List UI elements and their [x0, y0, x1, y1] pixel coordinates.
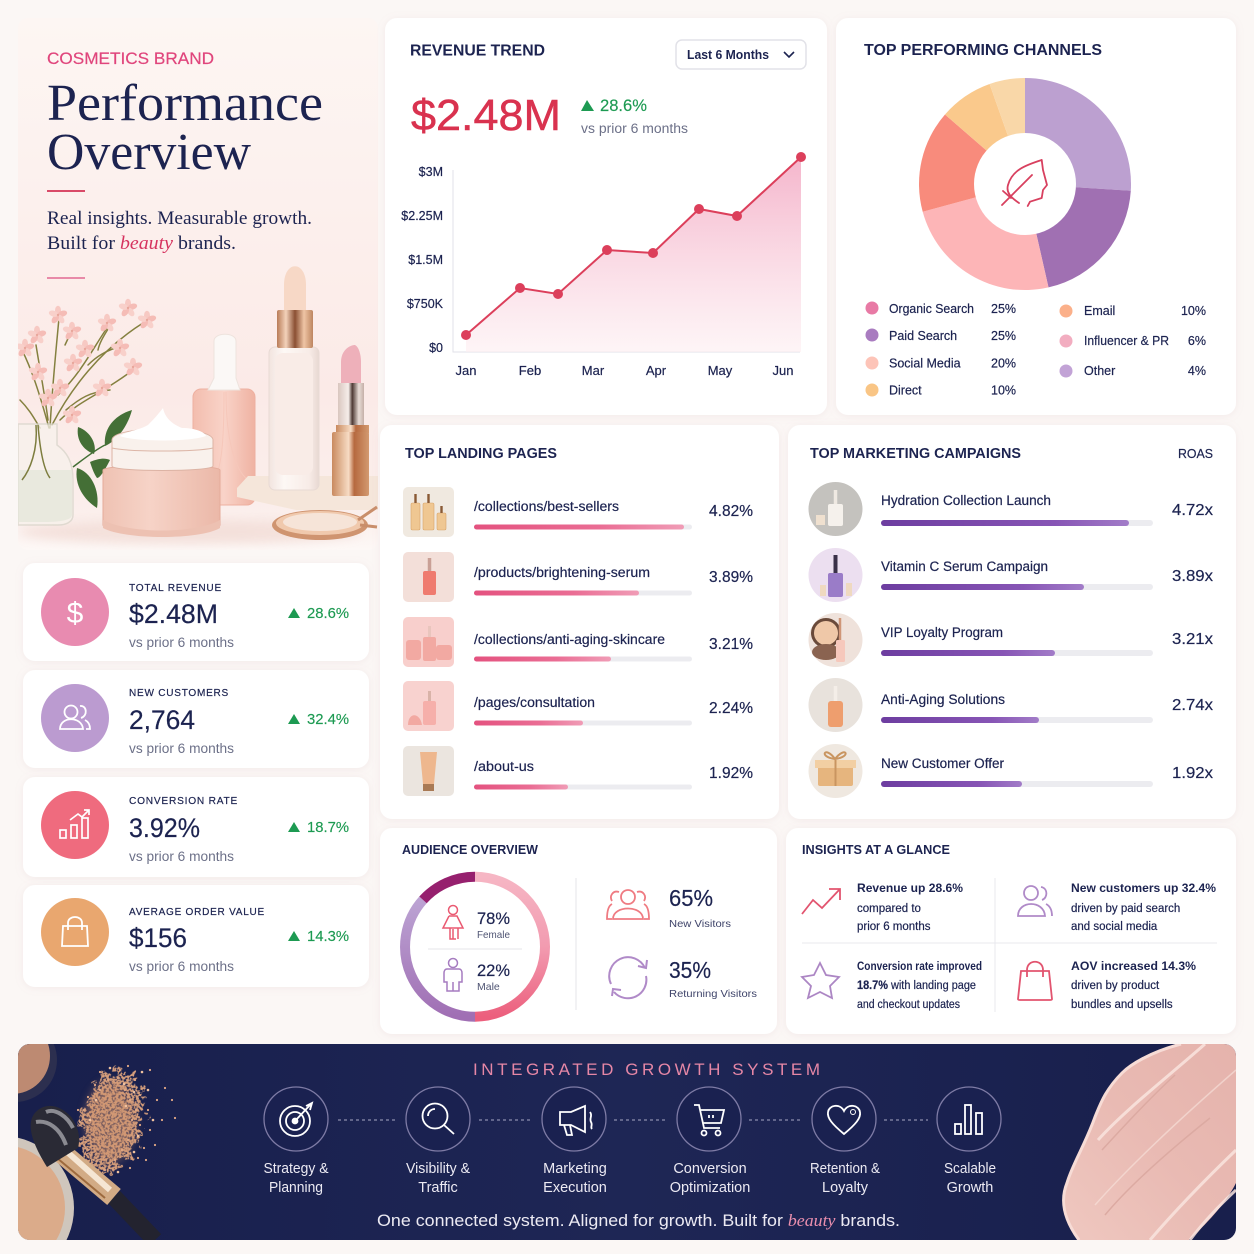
panel: top marketing campaigns	[788, 425, 1236, 819]
legend: 10%	[1181, 304, 1206, 318]
legend: Paid Search	[889, 329, 957, 343]
insight: customers: and social media	[1071, 921, 1158, 933]
row: brightening serum	[403, 552, 753, 602]
delta: 28.6%	[307, 605, 349, 622]
illustration: cream smear	[1064, 1044, 1236, 1240]
row: about us: 1.92%	[709, 765, 753, 782]
step: retention: Loyalty	[822, 1180, 869, 1196]
step: scalable growth: Scalable	[944, 1161, 996, 1177]
legend: 10%	[991, 384, 1016, 398]
brand label: COSMETICS BRAND	[47, 50, 214, 68]
row: vip loyalty: VIP Loyalty Program	[881, 625, 1003, 640]
row: new customer: New Customer Offer	[881, 756, 1004, 771]
icon: bag	[1018, 962, 1052, 1000]
panel: audience overview	[380, 828, 777, 1034]
icon: bar chart growth	[41, 791, 109, 859]
label and value: AVERAGE ORDER VALUE	[129, 906, 265, 918]
dropdown: Last 6 Months	[687, 48, 769, 62]
icon: trend up	[802, 889, 840, 914]
step: visibility: Traffic	[418, 1180, 458, 1196]
label and value	[129, 906, 265, 974]
row: vitamin c	[808, 548, 1213, 602]
insight: aov	[1071, 961, 1196, 1011]
row: consultation: /pages/consultation	[474, 695, 595, 710]
panel: hero	[15, 18, 378, 550]
panel: KPI new customers	[23, 670, 369, 768]
icon: female	[443, 906, 463, 939]
step: marketing	[542, 1087, 607, 1196]
returning visitors stat	[669, 957, 757, 1000]
label and value: vs prior 6 months	[129, 741, 234, 756]
panel: top performing channels	[836, 18, 1236, 415]
banner: integrated growth system	[18, 1044, 1236, 1240]
marble slab	[237, 476, 378, 510]
heading: TOP MARKETING CAMPAIGNS	[810, 446, 1021, 462]
tagline	[47, 208, 312, 254]
row: anti-aging: Anti-Aging Solutions	[881, 692, 1005, 707]
legend: Other	[1084, 364, 1115, 378]
step: scalable growth: Growth	[947, 1180, 993, 1196]
insight: conversion: Conversion rate improved	[857, 961, 982, 973]
step: strategy	[264, 1087, 329, 1196]
label and value: 2,764	[129, 705, 195, 735]
label and value	[129, 687, 234, 756]
label and value: vs prior 6 months	[129, 849, 234, 864]
delta	[288, 819, 349, 836]
line chart: May	[708, 363, 733, 378]
insight: revenue: compared to	[857, 903, 921, 915]
new visitors stat: 65%	[669, 885, 713, 911]
heading: TOP PERFORMING CHANNELS	[864, 42, 1102, 59]
row: anti-aging	[808, 678, 1213, 732]
tagline: Built for beauty brands.	[47, 233, 236, 254]
icon: returning visitors	[609, 957, 647, 998]
row: best sellers	[403, 487, 753, 537]
label and value: vs prior 6 months	[129, 635, 234, 650]
line chart: Mar	[582, 363, 605, 378]
step: retention	[810, 1087, 880, 1196]
column label: ROAS	[1178, 446, 1213, 461]
step: strategy: Planning	[269, 1180, 323, 1196]
legend	[866, 302, 1206, 398]
delta	[288, 605, 349, 622]
panel: KPI average order value	[23, 885, 369, 987]
heading: AUDIENCE OVERVIEW	[402, 842, 539, 857]
female stat: 78%	[477, 909, 510, 928]
icon: shopping bag	[41, 898, 109, 966]
insight: aov: AOV increased 14.3%	[1071, 961, 1196, 973]
big value: $2.48M	[411, 91, 561, 140]
row: brightening serum: /products/brightening-serum	[474, 565, 650, 580]
step: retention: Retention &	[810, 1161, 880, 1177]
step: visibility	[406, 1087, 470, 1196]
line chart: $0	[429, 341, 443, 355]
title: Overview	[47, 124, 251, 181]
heading: INSIGHTS AT A GLANCE	[802, 842, 950, 857]
row: best sellers: 4.82%	[709, 503, 753, 520]
connectors	[338, 1119, 928, 1121]
icon: dollar: $	[67, 597, 84, 630]
heading: TOP LANDING PAGES	[405, 446, 557, 462]
row: vitamin c: 3.89x	[1172, 568, 1213, 585]
row: vitamin c: Vitamin C Serum Campaign	[881, 559, 1048, 574]
title	[47, 75, 323, 181]
label and value: CONVERSION RATE	[129, 795, 238, 807]
label and value	[129, 795, 238, 864]
banner tagline: One connected system. Aligned for growth. Built for beauty brands.	[377, 1211, 900, 1230]
legend: Direct	[889, 384, 922, 398]
legend: 4%	[1188, 364, 1206, 378]
row: new customer: 1.92x	[1172, 765, 1213, 782]
donut chart	[919, 78, 1131, 290]
row: vip loyalty: 3.21x	[1172, 631, 1213, 648]
delta	[288, 711, 349, 728]
pink serum bottle	[193, 334, 255, 505]
insight: revenue: Revenue up 28.6%	[857, 883, 963, 895]
label and value: NEW CUSTOMERS	[129, 687, 229, 699]
line chart: Apr	[646, 363, 667, 378]
legend: Social Media	[889, 356, 961, 370]
female stat: Female	[477, 929, 510, 941]
lipstick	[332, 345, 369, 496]
growth: vs prior 6 months	[581, 121, 688, 136]
line chart: $750K	[407, 297, 444, 311]
panel: KPI conversion rate	[23, 777, 369, 877]
returning visitors stat: 35%	[669, 957, 711, 983]
insight: aov: driven by product	[1071, 980, 1160, 992]
heading: REVENUE TREND	[410, 42, 545, 60]
row: consultation	[403, 681, 753, 731]
row: best sellers: /collections/best-sellers	[474, 499, 619, 514]
icon: customers	[1018, 886, 1052, 916]
row: hydration: Hydration Collection Launch	[881, 493, 1051, 508]
delta: 18.7%	[307, 819, 349, 836]
legend: Organic Search	[889, 302, 974, 316]
panel: top landing pages	[380, 425, 779, 819]
row: anti-aging skincare	[403, 617, 753, 667]
delta	[288, 928, 349, 945]
label and value: TOTAL REVENUE	[129, 582, 222, 594]
male stat	[477, 961, 510, 993]
delta: 14.3%	[307, 928, 349, 945]
line chart: $3M	[419, 165, 443, 179]
banner heading: INTEGRATED GROWTH SYSTEM	[473, 1060, 820, 1079]
line chart: Jun	[773, 363, 793, 378]
flowers	[20, 318, 143, 428]
dropdown	[676, 40, 806, 69]
line chart: $2.25M	[401, 209, 443, 223]
row: anti-aging: 2.74x	[1172, 697, 1213, 714]
panel: insights at a glance	[786, 828, 1236, 1034]
row: new customer	[808, 744, 1213, 798]
label and value	[129, 582, 234, 650]
label and value: 3.92%	[129, 813, 200, 843]
tall serum bottle	[269, 266, 319, 490]
product still life	[15, 266, 378, 544]
line chart	[401, 152, 806, 378]
row: about us	[403, 746, 753, 796]
insight: customers	[1071, 883, 1216, 933]
growth	[581, 97, 688, 136]
row: anti-aging skincare: 3.21%	[709, 636, 753, 653]
step: strategy: Strategy &	[264, 1161, 329, 1177]
step: conversion	[670, 1087, 750, 1196]
label and value: vs prior 6 months	[129, 959, 234, 974]
male stat: 22%	[477, 961, 510, 980]
panel: revenue trend	[385, 18, 827, 415]
illustration: compacts, brush and powder	[18, 1044, 176, 1240]
vase	[18, 424, 73, 525]
row: vip loyalty	[808, 613, 1213, 667]
step: marketing: Execution	[543, 1180, 607, 1196]
legend: 20%	[991, 356, 1016, 370]
insight: customers: New customers up 32.4%	[1071, 883, 1216, 895]
new visitors stat	[669, 885, 731, 930]
legend: 25%	[991, 302, 1016, 316]
icon: users	[41, 684, 109, 752]
icon: male	[444, 958, 462, 991]
insight: customers: driven by paid search	[1071, 903, 1180, 915]
male stat: Male	[477, 981, 500, 993]
icon: star	[802, 963, 839, 998]
female stat	[477, 909, 510, 941]
returning visitors stat: Returning Visitors	[669, 988, 757, 1000]
insight: aov: bundles and upsells	[1071, 999, 1173, 1011]
tagline: Real insights. Measurable growth.	[47, 208, 312, 229]
delta: 32.4%	[307, 711, 349, 728]
leaves	[73, 410, 132, 508]
row: anti-aging skincare: /collections/anti-aging-skincare	[474, 632, 665, 647]
insight: revenue	[857, 883, 963, 933]
icon: new visitors	[607, 890, 649, 919]
line chart: Jan	[456, 363, 476, 378]
row: brightening serum: 3.89%	[709, 569, 753, 586]
line chart: Feb	[519, 363, 541, 378]
label and value: $156	[129, 923, 187, 953]
step: scalable growth	[937, 1087, 1001, 1196]
insight: conversion: and checkout updates	[857, 999, 960, 1011]
row: hydration: 4.72x	[1172, 502, 1213, 519]
label and value: $2.48M	[129, 599, 218, 629]
cream jar	[103, 408, 220, 537]
gender ring	[405, 877, 545, 1017]
compact mirror	[272, 507, 377, 540]
row: about us: /about-us	[474, 759, 534, 774]
insight: conversion	[857, 961, 982, 1011]
legend: Influencer & PR	[1084, 334, 1169, 348]
step: visibility: Visibility &	[406, 1161, 470, 1177]
growth: 28.6%	[600, 97, 647, 115]
legend: 6%	[1188, 334, 1206, 348]
insight: revenue: prior 6 months	[857, 921, 931, 933]
row: hydration	[808, 482, 1213, 536]
insight: conversion: 18.7% with landing page	[857, 980, 976, 992]
title: Performance	[47, 75, 323, 132]
legend: 25%	[991, 329, 1016, 343]
new visitors stat: New Visitors	[669, 918, 731, 930]
step: marketing: Marketing	[543, 1161, 607, 1177]
panel: KPI total revenue	[23, 563, 369, 661]
step: conversion: Optimization	[670, 1180, 750, 1196]
icon: leaf face	[1002, 160, 1047, 206]
row: consultation: 2.24%	[709, 700, 753, 717]
legend: Email	[1084, 304, 1115, 318]
icon: dollar	[41, 578, 109, 646]
step: conversion: Conversion	[673, 1161, 747, 1177]
line chart: $1.5M	[408, 253, 443, 267]
